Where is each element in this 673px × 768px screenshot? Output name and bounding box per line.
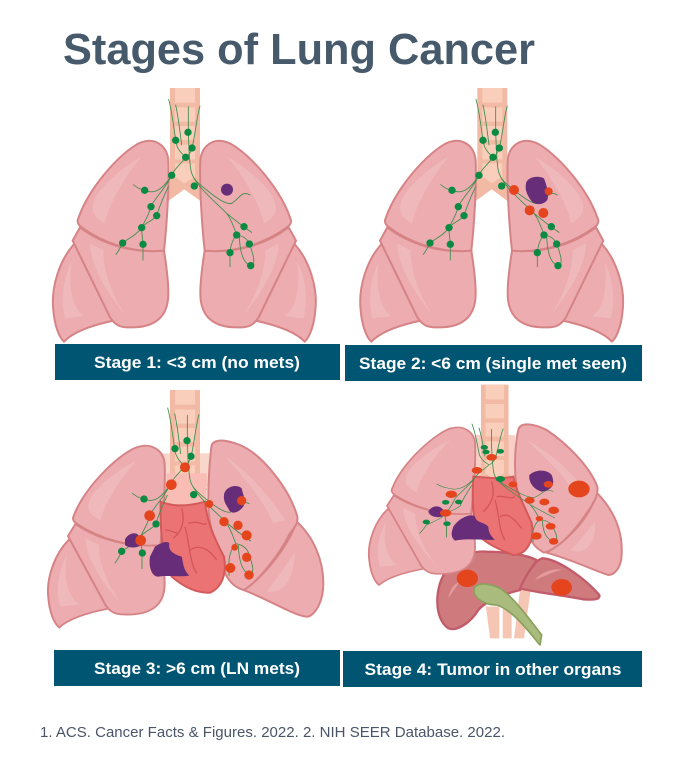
- liver: [437, 552, 599, 629]
- right lung: [515, 424, 622, 575]
- stage 3 label: Stage 3: >6 cm (LN mets): [94, 659, 300, 678]
- tumor: [221, 184, 233, 196]
- stage 4 label: [343, 651, 642, 687]
- heart: [161, 502, 225, 593]
- tumor: [526, 177, 548, 204]
- panel: stage 1 lungs: [53, 88, 316, 342]
- metastatic lymph nodes: [509, 185, 553, 218]
- panel: stage 4 lungs, heart, liver: [369, 385, 622, 645]
- stage 1 label: [55, 344, 340, 380]
- stage 3 label: [54, 650, 340, 686]
- tumors: [428, 471, 553, 541]
- stage 2 label: Stage 2: <6 cm (single met seen): [359, 354, 627, 373]
- title: Stages of Lung Cancer: [63, 25, 535, 74]
- metastatic lymph nodes: [135, 462, 254, 580]
- gallbladder: [474, 584, 542, 645]
- footnote references: 1. ACS. Cancer Facts & Figures. 2022. 2. NIH SEER Database. 2022.: [40, 725, 505, 741]
- healthy lymph nodes: [118, 437, 197, 557]
- stage 2 label: [345, 345, 642, 381]
- heart: [473, 477, 532, 555]
- healthy lymph nodes: [423, 445, 505, 526]
- panel: stage 2 lungs: [360, 88, 623, 342]
- right lung: [208, 441, 323, 617]
- tumors: [125, 486, 245, 577]
- stage 1 label: Stage 1: <3 cm (no mets): [94, 353, 300, 372]
- descending vessels: [486, 590, 531, 638]
- stage 4 label: Stage 4: Tumor in other organs: [364, 660, 622, 679]
- panel: stage 3 lungs and heart: [48, 390, 323, 627]
- metastases: [440, 454, 590, 596]
